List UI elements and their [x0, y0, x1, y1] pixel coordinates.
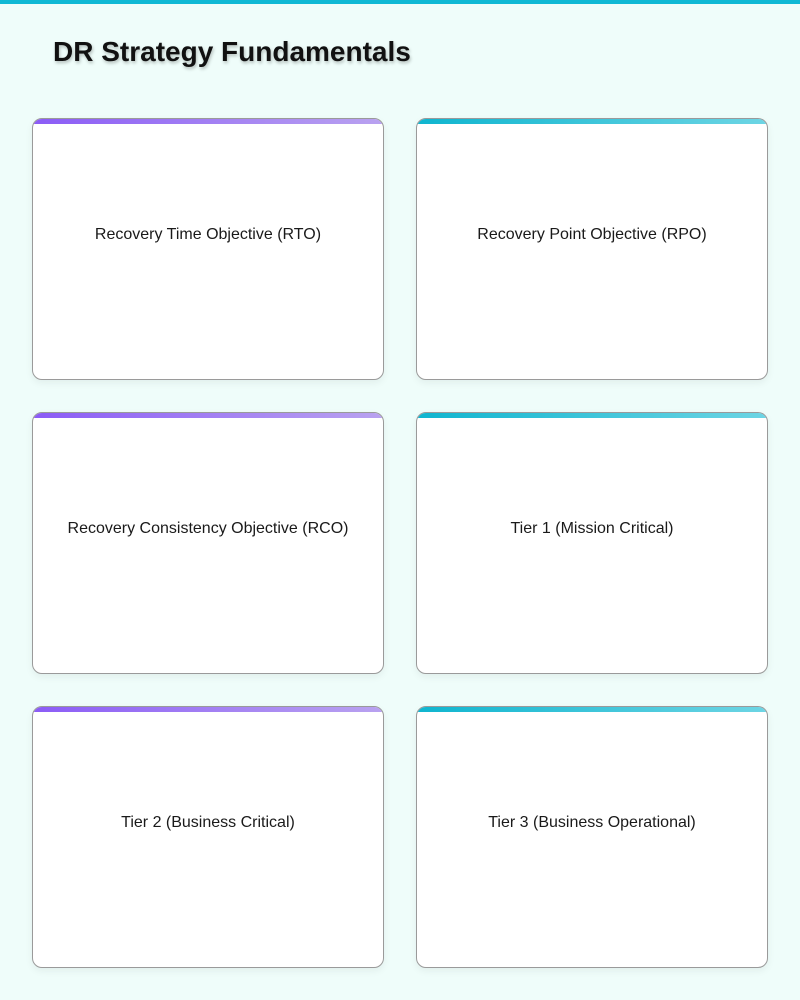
panel: Tier 1 [416, 412, 768, 674]
panel: Tier 1: Tier 1 (Mission Critical) [510, 520, 673, 537]
panel: Tier 3 [416, 706, 768, 968]
top accent bar [0, 0, 800, 4]
panel: RTO [32, 118, 384, 380]
panel: Tier 2: Tier 2 (Business Critical) [121, 814, 295, 831]
panel: Tier 2 [32, 706, 384, 968]
panel: RPO [416, 118, 768, 380]
panel: RPO: Recovery Point Objective (RPO) [477, 226, 707, 243]
panel: RCO: Recovery Consistency Objective (RCO) [68, 520, 348, 537]
panel: RCO [32, 412, 384, 674]
panel: RTO: Recovery Time Objective (RTO) [95, 226, 321, 243]
panel: Tier 3: Tier 3 (Business Operational) [488, 814, 696, 831]
title: DR Strategy Fundamentals [53, 36, 411, 67]
